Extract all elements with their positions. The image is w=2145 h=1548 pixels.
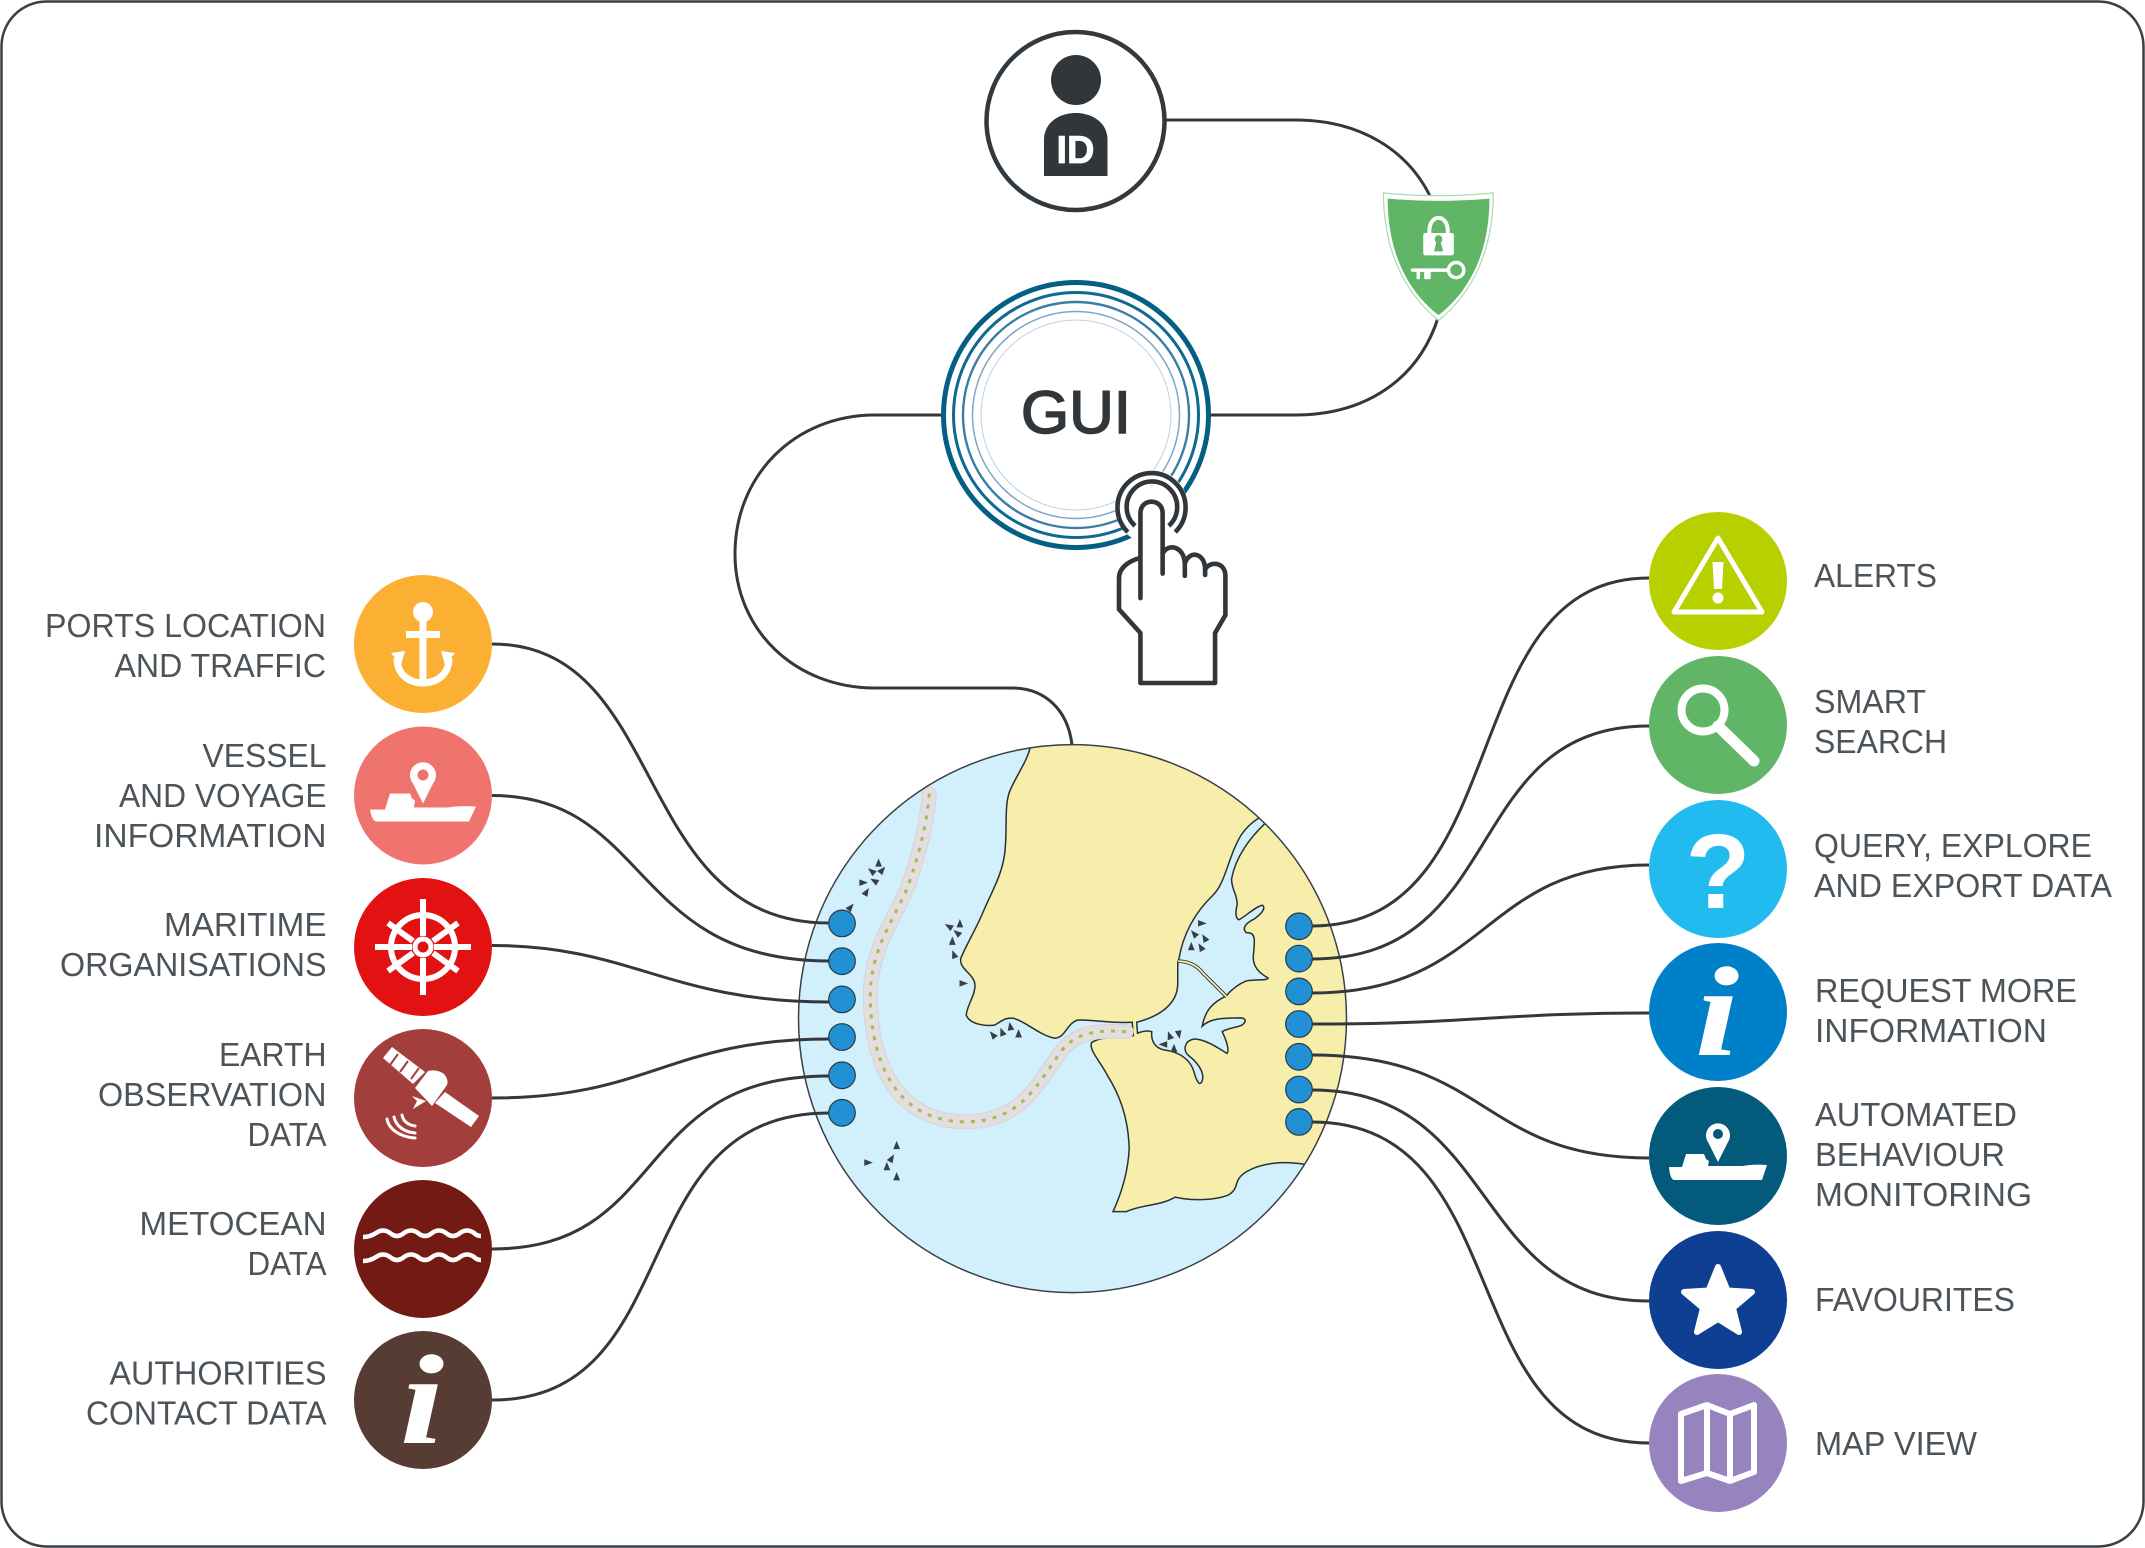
connector: behaviour monitoring to globe [1312,1055,1649,1158]
icon: query and export: ? [1686,813,1750,931]
label: ports location: PORTS LOCATION [45,607,326,644]
GUI button [944,282,1208,548]
label: ports location [45,607,326,684]
connector: vessel to globe [492,796,829,961]
label: maritime organisations: ORGANISATIONS [60,946,326,983]
label: automated behaviour monitoring [1815,1096,2032,1213]
label: maritime organisations: MARITIME [164,906,326,943]
icon: smart search [1649,656,1787,794]
icon: ports location [354,575,492,713]
connector: maritime organisations to globe [492,946,829,1002]
shipping lane band [870,794,1126,1122]
icon: request more information: i [1695,942,1739,1083]
label: smart search [1814,683,1947,760]
globe outline [798,745,1346,1293]
label: request more information [1815,972,2077,1049]
icon: user ID: ID [1056,129,1094,172]
shipping lane fill [870,794,1126,1122]
causeway [1178,961,1227,997]
label: query and export: QUERY, EXPLORE [1814,827,2092,864]
icon: metocean data [354,1180,492,1318]
land and shipping lane [870,730,1382,1212]
label: request more information: REQUEST MORE [1815,972,2077,1009]
icon: user ID [986,32,1164,210]
connector: ID to shield [1166,120,1431,198]
label: vessel and voyage: INFORMATION [94,817,326,854]
GUI label: GUI [1021,379,1131,446]
icon: alerts [1649,512,1787,650]
globe map [798,730,1382,1293]
shipping lane vessel markers [870,794,1126,1122]
label: smart search: SMART [1814,683,1926,720]
left connection dots [829,910,855,1126]
icon: maritime organisations [354,878,492,1016]
label: vessel and voyage: AND VOYAGE [119,777,326,814]
label: favourites: FAVOURITES [1815,1281,2015,1318]
label: request more information: INFORMATION [1815,1012,2047,1049]
label: earth observation: EARTH [219,1036,326,1073]
icon: authorities contact data: i [400,1330,444,1471]
right connection dots [1286,913,1312,1135]
connector: request information to globe [1312,1013,1649,1024]
icon: automated behaviour monitoring [1649,1087,1787,1225]
connector: earth observation to globe [492,1039,829,1098]
connector: GUI to globe [735,415,1072,745]
connector: ports to globe [492,644,829,923]
icon: earth observation [354,1029,492,1167]
label: authorities contact data [86,1354,326,1432]
land masses [960,745,1346,1212]
icon: map view [1649,1374,1787,1512]
icon: vessel and voyage [354,726,492,864]
label: automated behaviour monitoring: AUTOMATED [1815,1096,2017,1133]
connector: metocean to globe [492,1076,829,1249]
label: vessel and voyage [94,737,326,854]
icon: query and export [1649,800,1787,938]
label: metocean data: METOCEAN [140,1205,326,1242]
label: query and export: AND EXPORT DATA [1814,867,2112,904]
label: ports location: AND TRAFFIC [114,647,326,684]
label: map view: MAP VIEW [1815,1425,1978,1462]
connector: authorities to globe [492,1113,829,1400]
label: metocean data [140,1205,326,1282]
icon: security shield [1383,193,1493,321]
label: metocean data: DATA [248,1245,326,1282]
label: automated behaviour monitoring: BEHAVIOUR [1815,1136,2005,1173]
label: earth observation: OBSERVATION [98,1076,326,1113]
label: alerts: ALERTS [1814,557,1937,594]
connector: alerts to globe [1312,578,1649,926]
causeway outline [1178,961,1227,997]
label: maritime organisations [60,906,326,983]
label: earth observation: DATA [248,1116,326,1153]
label: smart search: SEARCH [1814,723,1947,760]
label: authorities contact data: CONTACT DATA [86,1394,326,1432]
connector: smart search to globe [1312,726,1649,959]
label: automated behaviour monitoring: MONITORING [1815,1176,2032,1213]
globe sea [798,745,1346,1293]
label: authorities contact data: AUTHORITIES [110,1354,326,1392]
label: vessel and voyage: VESSEL [202,737,326,774]
icon: authorities contact data [354,1330,492,1471]
connector: query to globe [1312,865,1649,993]
connector: favourites to globe [1312,1090,1649,1301]
vessel clusters [845,858,1209,1180]
icon: request more information [1649,942,1787,1083]
icon: favourites [1649,1231,1787,1369]
connector: shield to GUI [1210,318,1438,415]
label: earth observation [98,1036,326,1153]
label: query and export [1814,827,2112,904]
icon: pointing hand [1115,470,1225,683]
connector: map view to globe [1312,1122,1649,1443]
